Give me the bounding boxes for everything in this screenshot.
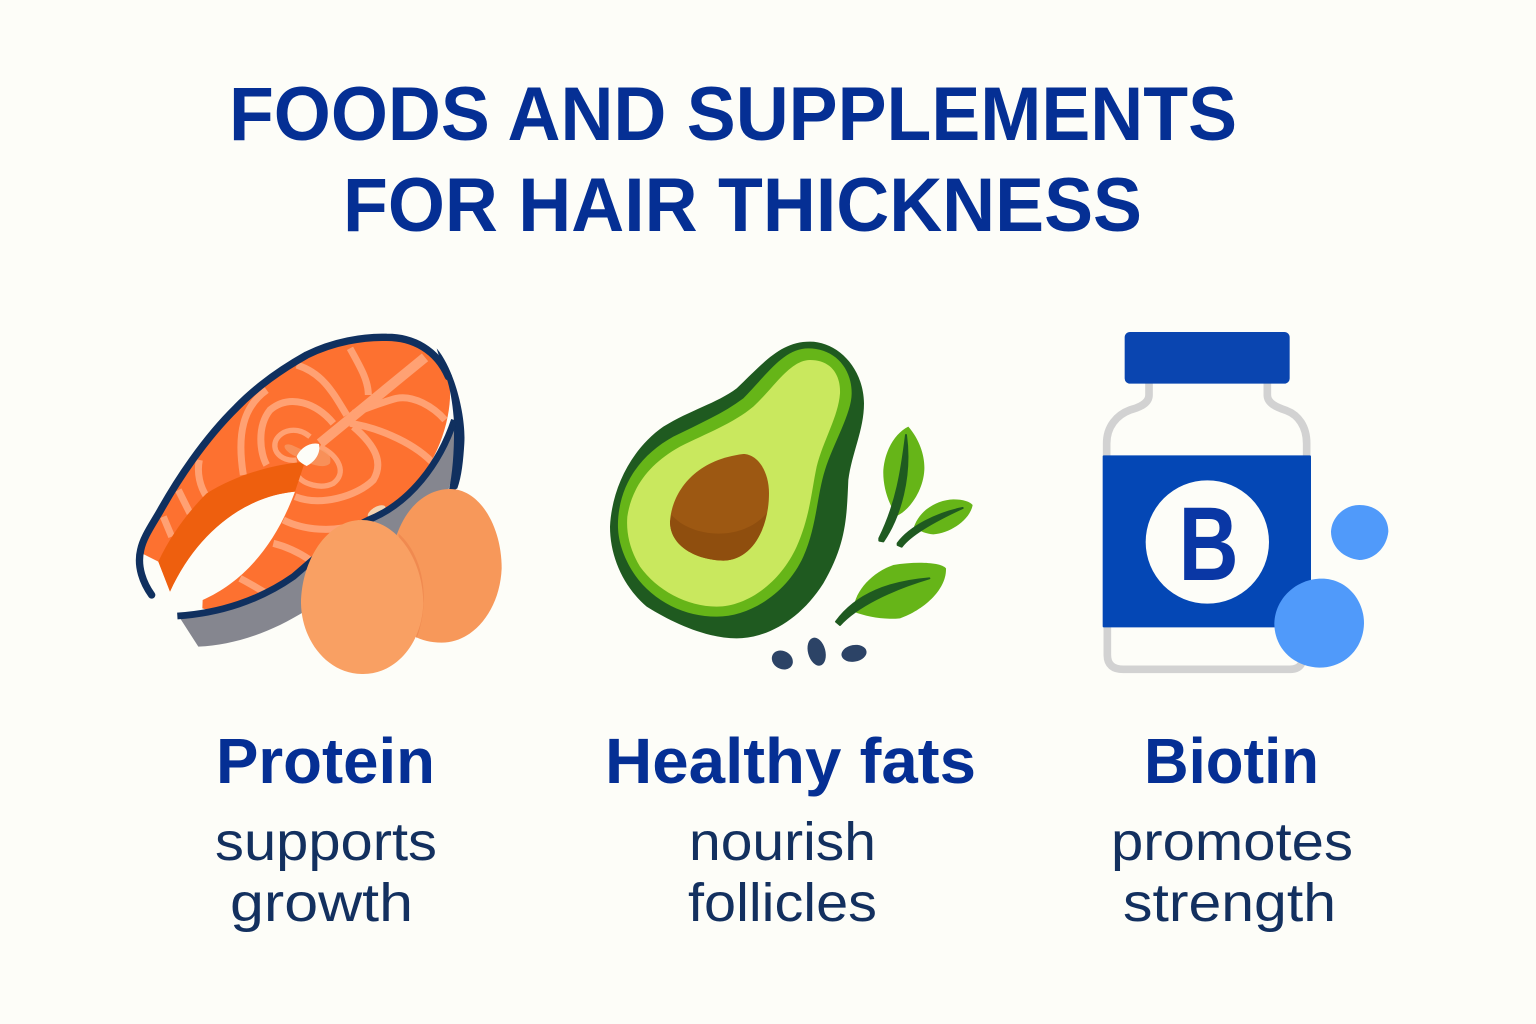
description: healthy fats: follicles — [688, 873, 877, 933]
title: FOR HAIR THICKNESS — [343, 163, 1142, 248]
icon: biotin supplement bottle: B — [1179, 486, 1239, 603]
heading: biotin: Biotin — [1144, 725, 1319, 797]
description: healthy fats — [688, 812, 877, 933]
description: protein — [215, 812, 437, 933]
heading: protein: Protein — [216, 725, 435, 797]
heading: healthy fats: Healthy fats — [605, 725, 976, 797]
description: biotin: promotes — [1111, 812, 1353, 872]
panel: protein — [139, 337, 502, 933]
description: biotin — [1111, 812, 1353, 933]
icon: avocado with leaves and seeds — [610, 342, 973, 673]
description: biotin: strength — [1123, 873, 1336, 933]
panel: healthy fats — [605, 342, 976, 933]
description: protein: growth — [230, 873, 413, 933]
icon: salmon steak and eggs — [139, 337, 502, 674]
description: protein: supports — [215, 812, 437, 872]
description: healthy fats: nourish — [689, 812, 876, 872]
title — [229, 72, 1237, 248]
icon: biotin supplement bottle — [1103, 332, 1388, 669]
title: FOODS AND SUPPLEMENTS — [229, 72, 1237, 157]
panel: biotin — [1103, 332, 1388, 933]
